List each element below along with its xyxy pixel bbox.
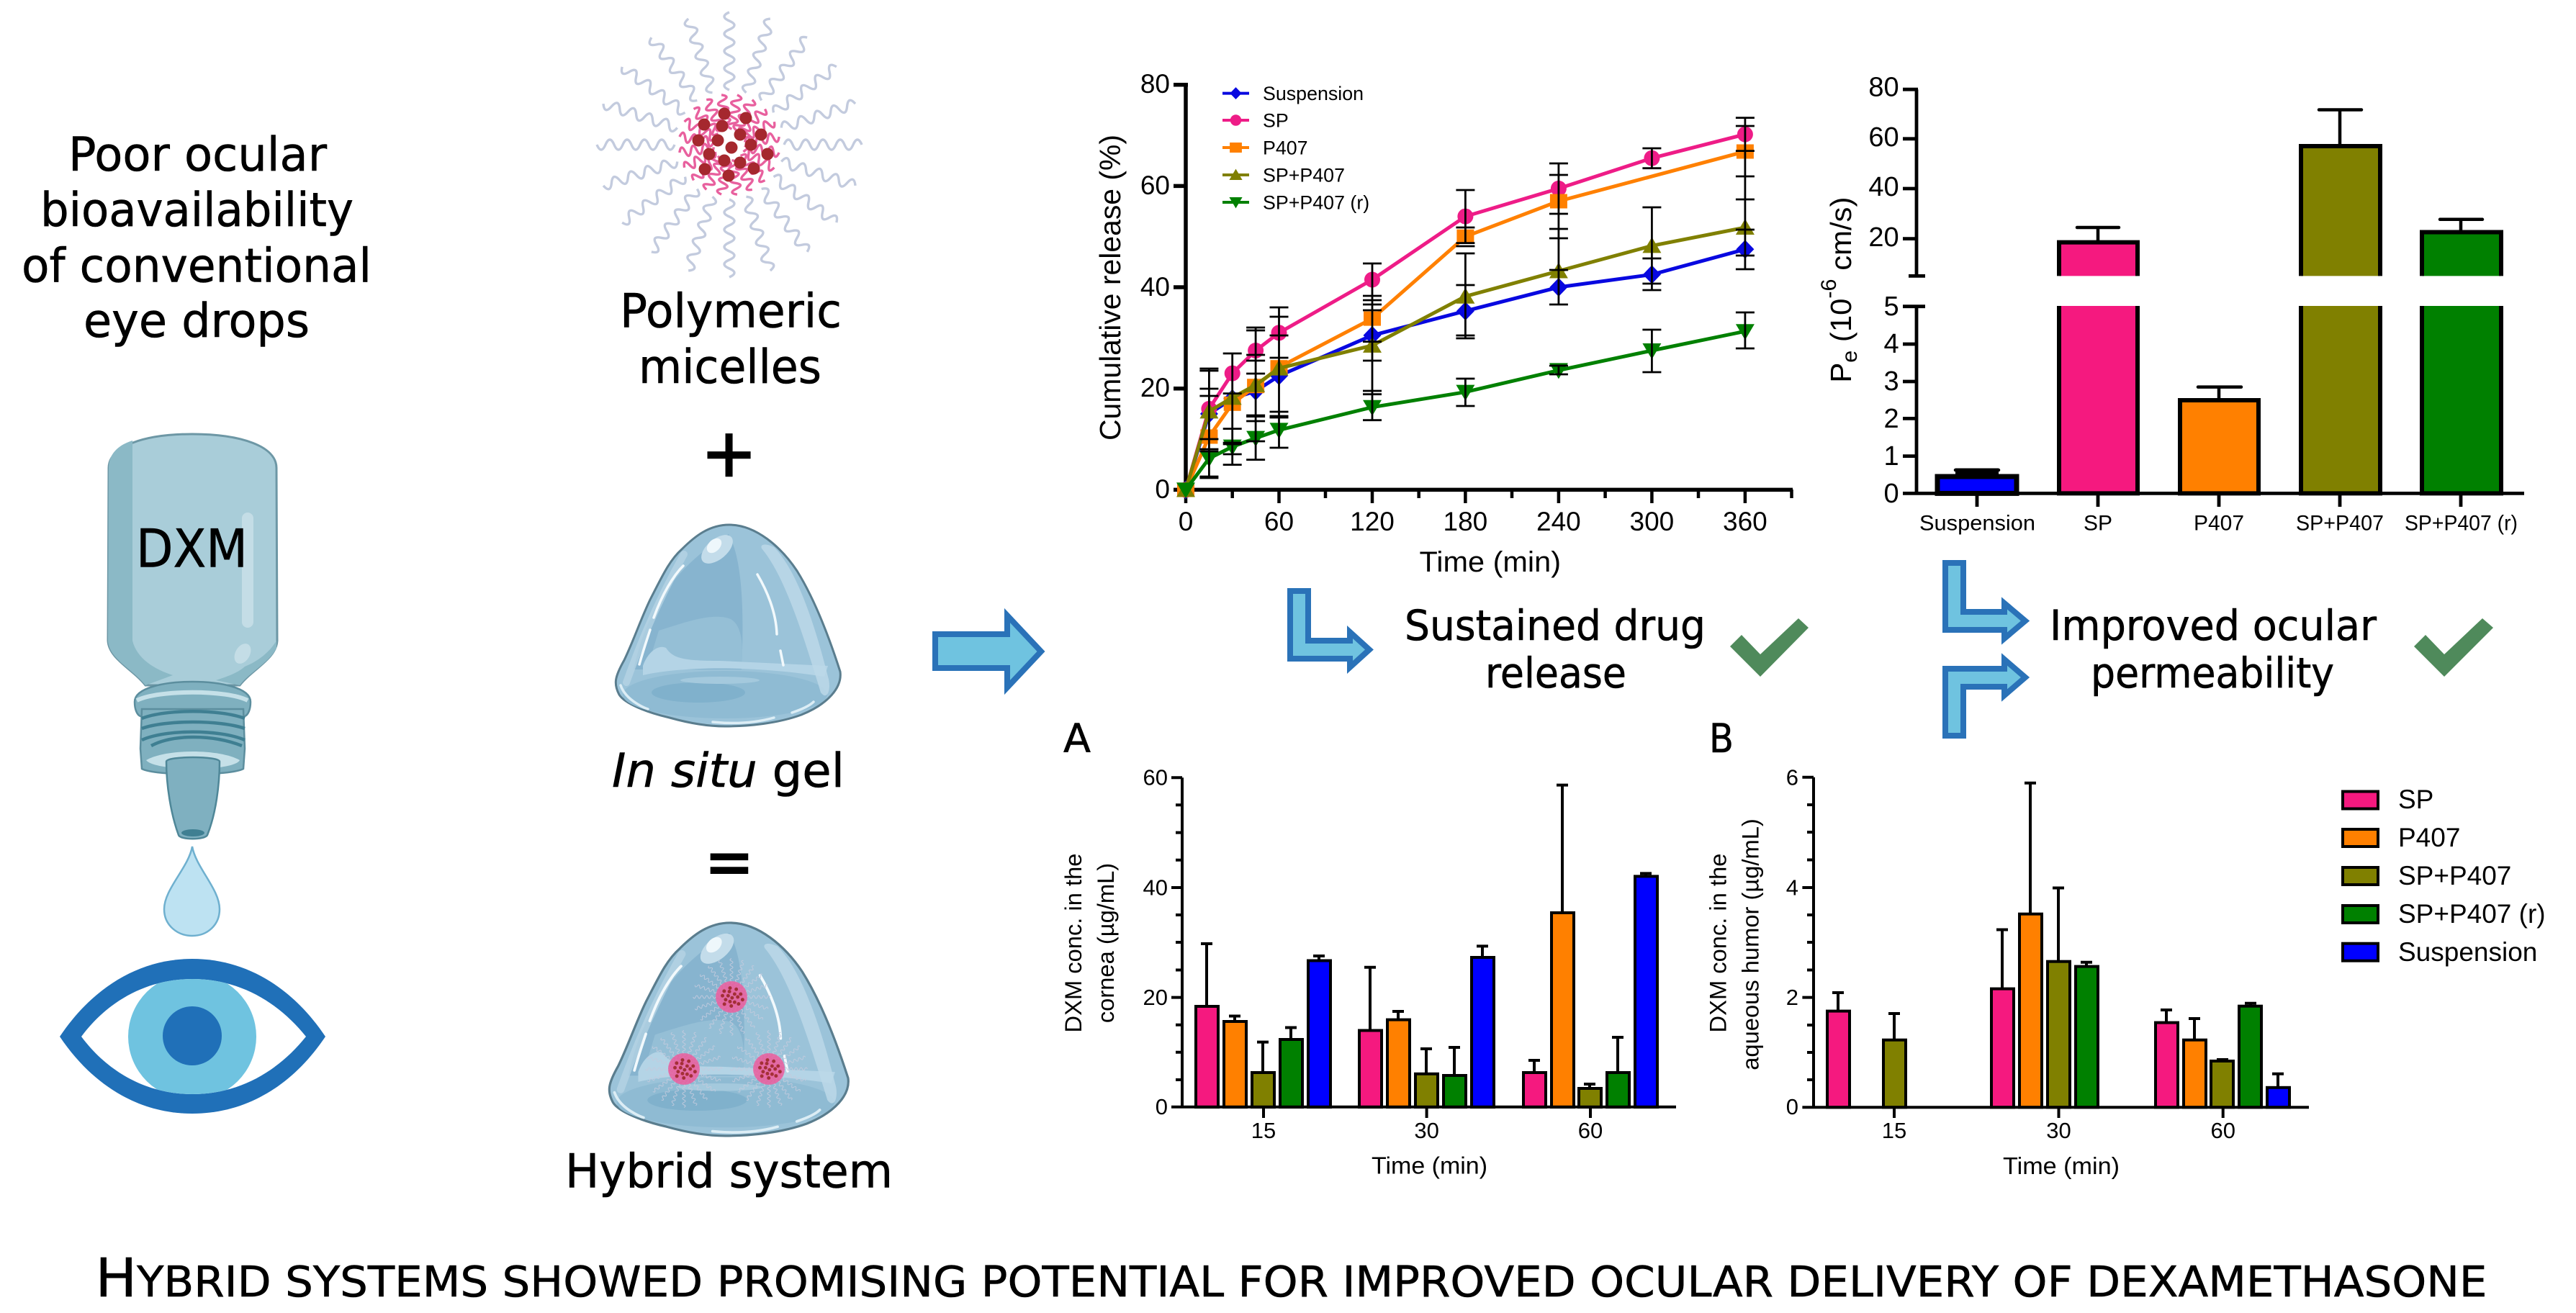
- tick labels: [1143, 764, 1603, 1143]
- category labels: SP: [2084, 512, 2112, 536]
- heading: poor ocular bioavailability: [22, 128, 371, 348]
- arrow: permeability upper: [1945, 563, 2025, 639]
- y axis title: (10: [1824, 299, 1857, 351]
- y axis title: Cumulative release (%): [1094, 135, 1127, 441]
- error bars: [1955, 109, 2482, 477]
- legend: release chart: Suspension: [1263, 83, 1364, 104]
- icon: in situ gel: [616, 525, 840, 726]
- conclusion banner: HYBRID SYSTEMS SHOWED PROMISING POTENTIAL FOR IMPROVED OCULAR DELIVERY OF DEXAMETHASONE: [95, 1247, 2487, 1309]
- tick labels: 0: [1156, 1094, 1168, 1119]
- tick labels: 30: [1414, 1118, 1439, 1143]
- heading: poor ocular bioavailability: eye drops: [84, 294, 310, 348]
- icon: drop: [164, 847, 220, 936]
- text: improved ocular permeability: [2050, 601, 2377, 698]
- category labels: [1919, 512, 2518, 536]
- label: in situ gel: In situ gel: [612, 744, 845, 798]
- error bars: [1832, 783, 2284, 1087]
- category labels: Suspension: [1919, 512, 2035, 536]
- y axis title: cm/s): [1824, 197, 1857, 279]
- chart A: cornea concentration: [1060, 764, 1676, 1180]
- axes: [1171, 777, 1676, 1118]
- tick labels: 2: [1786, 985, 1798, 1010]
- text: sustained drug release: Sustained drug: [1405, 601, 1706, 650]
- x axis title: Time (min): [1420, 546, 1561, 578]
- tick labels: 20: [1868, 222, 1899, 253]
- label: polymeric micelles: Polymeric: [620, 285, 842, 339]
- text: improved ocular permeability: permeability: [2091, 649, 2334, 698]
- label: hybrid system: Hybrid system: [565, 1145, 893, 1199]
- series: SP+P407: [1176, 219, 1755, 497]
- y axis title: aqueous humor (µg/mL): [1737, 818, 1764, 1070]
- axis tick labels: 0: [1155, 474, 1170, 504]
- y axis title: DXM conc. in the: [1705, 854, 1731, 1032]
- tick labels: 4: [1883, 329, 1899, 359]
- label: polymeric micelles: micelles: [639, 340, 821, 394]
- icon: check mark: [1730, 618, 1809, 677]
- category labels: SP+P407: [2296, 512, 2384, 536]
- bars: [1937, 146, 2501, 493]
- legend: release chart: [1222, 83, 1369, 213]
- tick labels: 80: [1868, 73, 1899, 103]
- series: SP: [1178, 127, 1753, 497]
- label: B: B: [1709, 716, 1734, 762]
- bars: [1827, 914, 2289, 1107]
- x axis title: Time (min): [2003, 1152, 2120, 1180]
- tick labels: 2: [1883, 404, 1899, 434]
- legend: bar charts: [2343, 785, 2546, 967]
- chart B: aqueous humor concentration: [1705, 764, 2309, 1180]
- y axis title: [1060, 854, 1119, 1032]
- category labels: P407: [2194, 512, 2244, 536]
- axes: [1174, 85, 1793, 492]
- label: A: A: [1063, 716, 1091, 762]
- legend: bar charts: P407: [2398, 823, 2460, 852]
- series: P407: [1177, 144, 1754, 497]
- series: SP+P407 (r): [1176, 324, 1755, 498]
- legend: bar charts: SP+P407 (r): [2398, 899, 2546, 929]
- heading: poor ocular bioavailability: bioavailability: [40, 184, 353, 238]
- chart: permeability: [1817, 73, 2524, 536]
- tick labels: 40: [1868, 172, 1899, 202]
- axis tick labels: 0: [1179, 507, 1193, 536]
- axis tick labels: 120: [1350, 507, 1395, 536]
- icon: polymeric micelle: [597, 12, 862, 277]
- tick labels: 60: [1868, 122, 1899, 153]
- icon: check mark: [2414, 618, 2493, 677]
- heading: poor ocular bioavailability: Poor ocular: [68, 128, 327, 182]
- error bars: [1201, 785, 1652, 1088]
- legend: release chart: SP+P407 (r): [1263, 191, 1369, 213]
- tick labels: 1: [1883, 441, 1899, 471]
- category labels: SP+P407 (r): [2405, 512, 2518, 536]
- tick labels: 3: [1883, 366, 1899, 397]
- axis tick labels: 300: [1630, 507, 1674, 536]
- axis tick labels: 360: [1723, 507, 1767, 536]
- arrow: permeability lower: [1945, 659, 2025, 736]
- y axis title: -6: [1817, 279, 1841, 299]
- y axis title: P: [1824, 363, 1857, 383]
- tick labels: [1786, 764, 2235, 1143]
- tick labels: 60: [1578, 1118, 1603, 1143]
- arrow: to sustained release: [1290, 591, 1369, 667]
- tick labels: [1868, 73, 1899, 509]
- axis tick labels: 80: [1140, 69, 1170, 99]
- tick labels: 20: [1143, 985, 1168, 1010]
- tick labels: 30: [2046, 1118, 2071, 1143]
- series: Suspension: [1176, 240, 1754, 499]
- icon: eye: [60, 959, 325, 1114]
- label: polymeric micelles: [620, 285, 842, 394]
- icon: hybrid system gel with micelles: [609, 923, 848, 1136]
- legend: bar charts: Suspension: [2398, 937, 2537, 967]
- text: sustained drug release: [1405, 601, 1706, 698]
- axes: [1903, 89, 2524, 507]
- tick labels: 40: [1143, 875, 1168, 900]
- tick labels: 5: [1883, 292, 1899, 322]
- axis tick labels: 20: [1140, 373, 1170, 402]
- legend: bar charts: SP: [2398, 785, 2433, 814]
- legend: bar charts: SP+P407: [2398, 861, 2511, 890]
- axis tick labels: 60: [1140, 171, 1170, 200]
- y axis title: [1705, 818, 1764, 1070]
- icon: eye drop bottle: [108, 434, 277, 839]
- tick labels: 6: [1786, 764, 1798, 790]
- y axis title: DXM conc. in the: [1060, 854, 1086, 1032]
- legend: release chart: SP: [1263, 109, 1289, 131]
- label: DXM: DXM: [136, 519, 248, 580]
- arrow: main: [935, 615, 1041, 687]
- chart: cumulative release: [1094, 69, 1793, 578]
- axis tick labels: [1140, 69, 1767, 536]
- tick labels: 60: [2210, 1118, 2235, 1143]
- equals sign: =: [704, 826, 755, 897]
- y axis title: e: [1838, 351, 1862, 363]
- text: improved ocular permeability: Improved ocular: [2050, 601, 2377, 650]
- axis tick labels: 240: [1536, 507, 1581, 536]
- tick labels: 0: [1786, 1094, 1798, 1119]
- legend: release chart: SP+P407: [1263, 164, 1345, 186]
- tick labels: 0: [1883, 479, 1899, 509]
- tick labels: 60: [1143, 764, 1168, 790]
- tick labels: 15: [1251, 1118, 1276, 1143]
- axes: [1802, 777, 2309, 1118]
- tick labels: 15: [1882, 1118, 1906, 1143]
- axis tick labels: 60: [1264, 507, 1294, 536]
- text: sustained drug release: release: [1485, 649, 1626, 698]
- heading: poor ocular bioavailability: of conventional: [22, 239, 371, 294]
- error bars: [1199, 118, 1755, 478]
- y axis title: cornea (µg/mL): [1092, 863, 1119, 1023]
- axis tick labels: 40: [1140, 272, 1170, 302]
- bars: [1196, 876, 1657, 1107]
- tick labels: 4: [1786, 875, 1798, 900]
- axis tick labels: 180: [1444, 507, 1487, 536]
- plus sign: +: [701, 415, 757, 492]
- x axis title: Time (min): [1372, 1152, 1487, 1180]
- legend: release chart: P407: [1263, 137, 1308, 158]
